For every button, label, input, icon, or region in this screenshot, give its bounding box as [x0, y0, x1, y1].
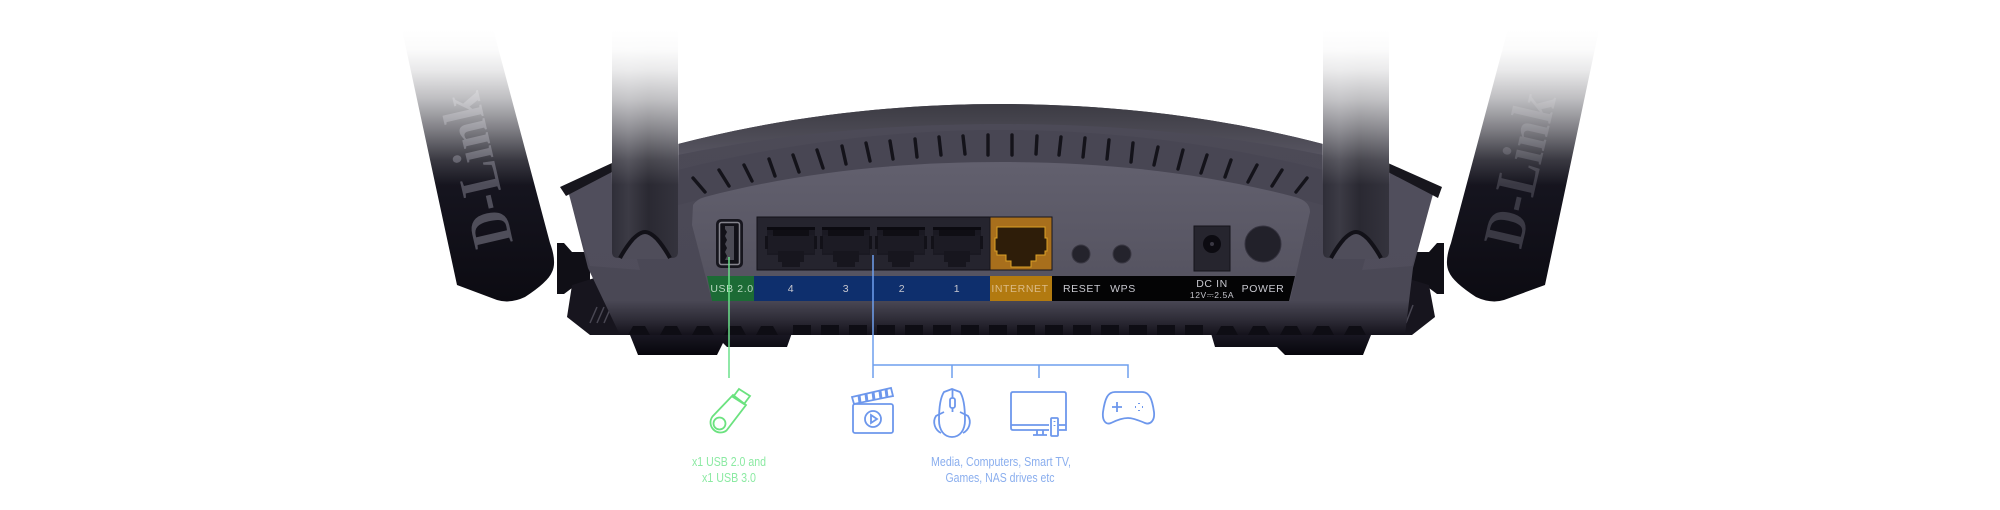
devices caption: Games, NAS drives etc [946, 471, 1054, 485]
right inner antenna [1322, 20, 1390, 259]
Internet port [990, 217, 1052, 270]
top rim [678, 104, 1323, 155]
body shell [568, 104, 1434, 335]
strip labels: USB 2.0 [710, 283, 754, 295]
left shoulder rim [560, 160, 625, 196]
strip labels: 4 [788, 283, 794, 295]
strip labels [710, 278, 1284, 300]
DC power jack [1194, 226, 1230, 271]
left shoulder facet [568, 172, 640, 270]
strip labels: INTERNET [991, 283, 1049, 295]
LAN port 1 [931, 227, 983, 267]
USB caption [692, 455, 766, 485]
icon: smart TV [1011, 392, 1066, 436]
rear feet [628, 330, 1373, 355]
LAN port block [757, 217, 990, 270]
USB caption: x1 USB 2.0 and [692, 455, 766, 469]
strip labels: 3 [843, 283, 849, 295]
USB port [716, 219, 743, 268]
power button [1245, 226, 1281, 262]
port label strip [707, 276, 1295, 301]
left outer antenna: D-Link [427, 86, 526, 254]
recessed rear panel [692, 162, 1310, 301]
green connector line [728, 257, 730, 378]
icon: computer mouse [934, 389, 970, 437]
USB caption: x1 USB 3.0 [702, 471, 756, 485]
ventilation slots [693, 135, 1307, 192]
devices caption: Media, Computers, Smart TV, [931, 455, 1071, 469]
LAN port 4 [765, 227, 817, 267]
right shoulder rim [1375, 160, 1442, 198]
LAN port 3 [820, 227, 872, 267]
strip labels: RESET [1063, 283, 1101, 295]
lower side blocks [567, 270, 1435, 335]
strip labels: 2 [899, 283, 905, 295]
blue connector tree [873, 255, 1128, 378]
strip labels: 1 [954, 283, 960, 295]
right outer antenna [1435, 20, 1610, 301]
strip labels: POWER [1242, 283, 1284, 295]
icon: game controller [1103, 392, 1154, 424]
devices caption [931, 455, 1071, 485]
strip labels: DC IN [1196, 278, 1228, 290]
icon: USB stick [710, 389, 750, 432]
left inner antenna [611, 20, 679, 259]
right shoulder facet [1362, 172, 1434, 270]
reset button [1072, 245, 1090, 263]
left outer antenna [395, 20, 570, 301]
bottom vent teeth [628, 325, 1366, 335]
icon: media clapperboard [852, 388, 893, 433]
router body [560, 104, 1442, 335]
strip labels: WPS [1110, 283, 1136, 295]
right outer antenna: D-Link [1470, 86, 1569, 253]
antenna joints [557, 243, 1444, 294]
LAN port 2 [875, 227, 927, 267]
WPS button [1113, 245, 1131, 263]
vent band [678, 130, 1323, 205]
strip labels: 12V⎓2.5A [1190, 290, 1234, 300]
